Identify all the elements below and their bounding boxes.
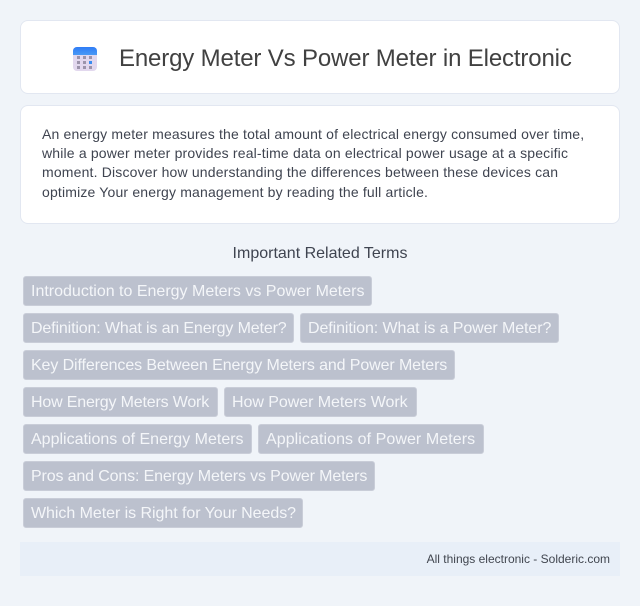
panel: intro text card bbox=[20, 105, 620, 224]
tag bbox=[23, 276, 372, 306]
text: intro paragraph: optimize Your energy management by reading the full article. bbox=[42, 184, 428, 200]
text: intro paragraph bbox=[42, 126, 584, 200]
heading: related terms: Important Related Terms bbox=[233, 245, 407, 262]
footer text: All things electronic - Solderic.com bbox=[427, 552, 610, 566]
tag: Applications of Power Meters bbox=[266, 431, 475, 448]
tag bbox=[23, 498, 303, 528]
tag: How Power Meters Work bbox=[232, 394, 408, 411]
tag: Definition: What is an Energy Meter? bbox=[31, 320, 287, 337]
tag bbox=[23, 387, 218, 417]
tag bbox=[23, 313, 294, 343]
tag bbox=[23, 350, 455, 380]
tag: Key Differences Between Energy Meters and Power Meters bbox=[31, 357, 447, 374]
text: intro paragraph: while a power meter provides real-time data on electrical power usage at a specific bbox=[42, 145, 568, 161]
tag: Pros and Cons: Energy Meters vs Power Meters bbox=[31, 468, 367, 485]
heading: title: Energy Meter Vs Power Meter in Electronic bbox=[119, 45, 572, 72]
tag bbox=[23, 424, 252, 454]
tag: How Energy Meters Work bbox=[31, 394, 209, 411]
tag: Applications of Energy Meters bbox=[31, 431, 244, 448]
panel: title card bbox=[20, 20, 620, 94]
footer bar bbox=[20, 542, 620, 576]
text: intro paragraph: An energy meter measures the total amount of electrical energy consumed over time, bbox=[42, 126, 584, 142]
tag list: related terms bbox=[23, 276, 559, 528]
tag bbox=[23, 461, 375, 491]
tag: Definition: What is a Power Meter? bbox=[308, 320, 551, 337]
tag: Which Meter is Right for Your Needs? bbox=[31, 505, 296, 522]
tag: Introduction to Energy Meters vs Power Meters bbox=[31, 283, 364, 300]
tag bbox=[224, 387, 417, 417]
text: intro paragraph: moment. Discover how understanding the differences between these devices can bbox=[42, 164, 558, 180]
tag bbox=[300, 313, 559, 343]
tag bbox=[258, 424, 484, 454]
icon: calendar bbox=[73, 47, 97, 71]
